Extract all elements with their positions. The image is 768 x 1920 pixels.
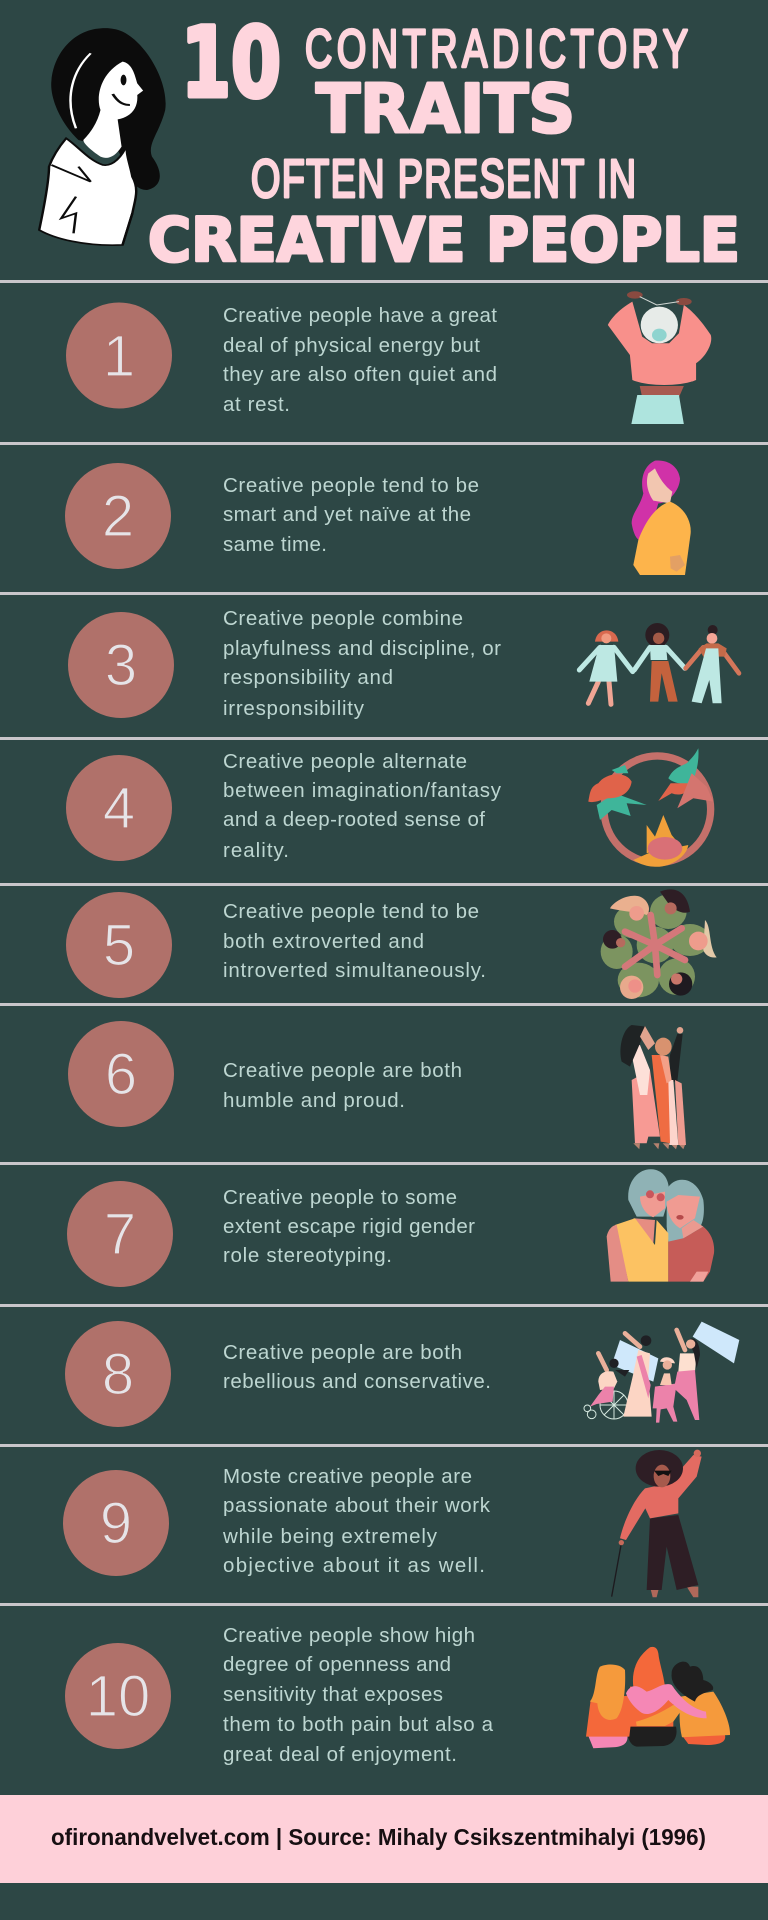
text: trait 10: degree of openness and	[223, 1653, 451, 1676]
text: trait 4	[223, 750, 502, 862]
number badge 6	[68, 1021, 174, 1127]
text: trait 7: Creative people to some	[223, 1186, 457, 1209]
icon: protest group with flags	[584, 1322, 739, 1423]
text: trait 3: playfulness and discipline, or	[223, 637, 501, 660]
text: trait 9	[222, 1465, 491, 1577]
number badge 2	[65, 463, 171, 569]
number badge 7	[67, 1181, 173, 1287]
text: trait 10	[223, 1624, 494, 1766]
panel: trait 5	[66, 889, 717, 999]
icon: woman with cane and raised fist	[612, 1450, 702, 1597]
text: trait 8: rebellious and conservative.	[223, 1370, 491, 1393]
panel: trait 10	[65, 1624, 730, 1766]
text: trait 10: sensitivity that exposes	[223, 1683, 443, 1706]
panel: trait 2	[65, 461, 691, 575]
icon: woman with magenta hair	[632, 461, 691, 575]
icon: two women embracing	[607, 1169, 714, 1282]
text: trait 10: them to both pain but also a	[223, 1713, 494, 1736]
text: trait 10: Creative people show high	[223, 1624, 475, 1647]
text: trait 8	[223, 1341, 491, 1393]
text: trait 7: role stereotyping.	[223, 1244, 392, 1267]
source line: ofironandvelvet.com | Source: Mihaly Csikszentmihalyi (1996)	[51, 1824, 706, 1850]
text: trait 1	[223, 304, 497, 416]
text: trait 8: Creative people are both	[223, 1341, 462, 1364]
icon: woman portrait	[39, 28, 166, 245]
panel: trait 6	[68, 1021, 686, 1149]
text: trait 10: great deal of enjoyment.	[223, 1743, 457, 1766]
panel: trait 1	[66, 291, 711, 424]
number badge 8	[65, 1321, 171, 1427]
number badge 9: 9	[100, 1491, 132, 1556]
panel: trait 8	[65, 1321, 739, 1427]
text: trait 1: deal of physical energy but	[223, 334, 480, 357]
text: trait 5: introverted simultaneously.	[223, 959, 486, 982]
number badge 3	[68, 612, 174, 718]
text: trait 9: passionate about their work	[223, 1494, 491, 1517]
text: trait 5	[223, 900, 486, 982]
text: trait 1: they are also often quiet and	[223, 363, 497, 386]
text: trait 9: objective about it as well.	[223, 1554, 485, 1577]
number badge 5	[66, 892, 172, 998]
panel: trait 3	[68, 607, 739, 720]
text: trait 3	[223, 607, 501, 720]
text: trait 6	[223, 1059, 462, 1112]
number badge 10	[65, 1643, 171, 1749]
icon: ring of three figures	[588, 748, 713, 867]
icon: three friends from behind	[586, 1647, 730, 1748]
text: trait 7	[223, 1186, 475, 1267]
text: trait 6: Creative people are both	[223, 1059, 462, 1082]
number badge 9	[63, 1470, 169, 1576]
icon: group of standing women	[620, 1025, 686, 1149]
number badge 2: 2	[102, 484, 134, 549]
title	[148, 7, 740, 276]
text: trait 9: while being extremely	[222, 1525, 438, 1548]
number badge 1: 1	[103, 324, 135, 389]
title number 10: 10	[181, 7, 281, 119]
text: trait 6: humble and proud.	[223, 1089, 405, 1112]
number badge 1	[66, 302, 172, 408]
text: trait 4: reality.	[223, 839, 289, 862]
footer	[0, 1795, 768, 1883]
panel: trait 7	[67, 1169, 714, 1287]
text: trait 3: irresponsibility	[223, 697, 365, 720]
text: trait 2: same time.	[223, 533, 327, 556]
text: trait 4: Creative people alternate	[223, 750, 467, 773]
panel: trait 9	[63, 1450, 702, 1597]
text: trait 2: smart and yet naïve at the	[223, 503, 471, 526]
number badge 6: 6	[105, 1042, 137, 1107]
dividers	[0, 280, 768, 1606]
icon: woman with raised arms	[608, 291, 711, 424]
number badge 4	[66, 755, 172, 861]
text: trait 1: Creative people have a great	[223, 304, 497, 327]
text: trait 2	[223, 474, 479, 556]
title line: often present in: OFTEN PRESENT IN	[251, 148, 636, 209]
number badge 4: 4	[103, 776, 135, 841]
text: trait 3: Creative people combine	[223, 607, 463, 630]
title line: creative people: CREATIVE PEOPLE	[148, 205, 740, 276]
text: trait 2: Creative people tend to be	[223, 474, 479, 497]
text: trait 4: and a deep-rooted sense of	[223, 808, 485, 831]
text: trait 4: between imagination/fantasy	[223, 779, 502, 802]
number badge 10: 10	[86, 1664, 150, 1729]
text: trait 5: Creative people tend to be	[223, 900, 479, 923]
text: trait 1: at rest.	[223, 393, 290, 416]
icon: circle of people seen from above	[601, 889, 717, 999]
number badge 8: 8	[102, 1342, 134, 1407]
number badge 3: 3	[105, 633, 137, 698]
title line: traits: TRAITS	[316, 70, 575, 148]
icon: three women holding hands	[579, 623, 739, 704]
title line: contradictory: CONTRADICTORY	[305, 18, 688, 79]
text: trait 5: both extroverted and	[223, 930, 424, 953]
panel: trait 4	[66, 748, 713, 867]
number badge 5: 5	[103, 913, 135, 978]
text: trait 3: responsibility and	[223, 666, 393, 689]
number badge 7: 7	[104, 1202, 136, 1267]
text: trait 7: extent escape rigid gender	[223, 1215, 475, 1238]
text: trait 9: Moste creative people are	[223, 1465, 472, 1488]
